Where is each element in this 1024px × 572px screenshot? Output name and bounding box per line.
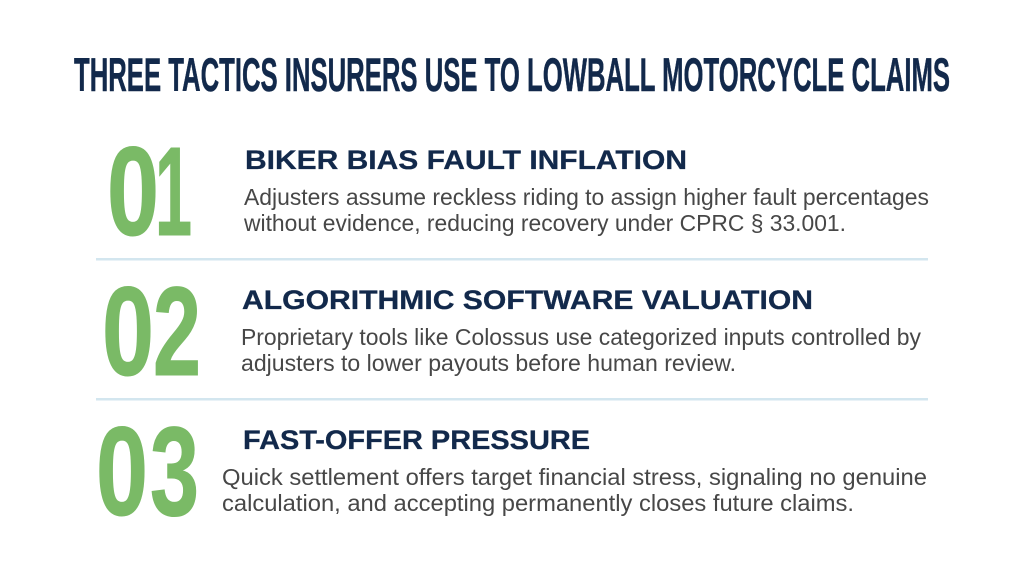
heading: biker bias: BIKER BIAS FAULT INFLATION bbox=[245, 145, 687, 175]
text block: fast-offer description bbox=[222, 464, 927, 516]
number 03: 3 bbox=[150, 401, 199, 542]
text block: biker bias description: without evidence, reducing recovery under CPRC § 33.001. bbox=[243, 210, 846, 236]
number 03 bbox=[96, 401, 199, 542]
number 01: 0 bbox=[107, 121, 159, 262]
text block: fast-offer description: calculation, and accepting permanently closes future claims. bbox=[222, 490, 854, 516]
text block: algorithmic valuation description: Proprietary tools like Colossus use categorized inputs controlled by bbox=[241, 324, 921, 350]
text block: fast-offer description: Quick settlement offers target financial stress, signaling no genuine bbox=[222, 464, 927, 490]
panel: tactic 01 bbox=[107, 121, 929, 262]
number 02: 2 bbox=[153, 261, 201, 402]
number 01: 1 bbox=[155, 121, 192, 262]
number 02: 0 bbox=[102, 261, 154, 402]
heading: fast-offer pressure: FAST-OFFER PRESSURE bbox=[243, 425, 590, 455]
panel: tactic 02 bbox=[102, 261, 921, 402]
text block: biker bias description: Adjusters assume reckless riding to assign higher fault percentages bbox=[244, 184, 929, 210]
number 03: 0 bbox=[96, 401, 148, 542]
text block: biker bias description bbox=[243, 184, 929, 236]
heading: algorithmic valuation: ALGORITHMIC SOFTWARE VALUATION bbox=[242, 285, 813, 315]
text block: algorithmic valuation description bbox=[241, 324, 921, 376]
panel: tactic 03 bbox=[96, 401, 927, 542]
text block: algorithmic valuation description: adjusters to lower payouts before human review. bbox=[241, 350, 736, 376]
